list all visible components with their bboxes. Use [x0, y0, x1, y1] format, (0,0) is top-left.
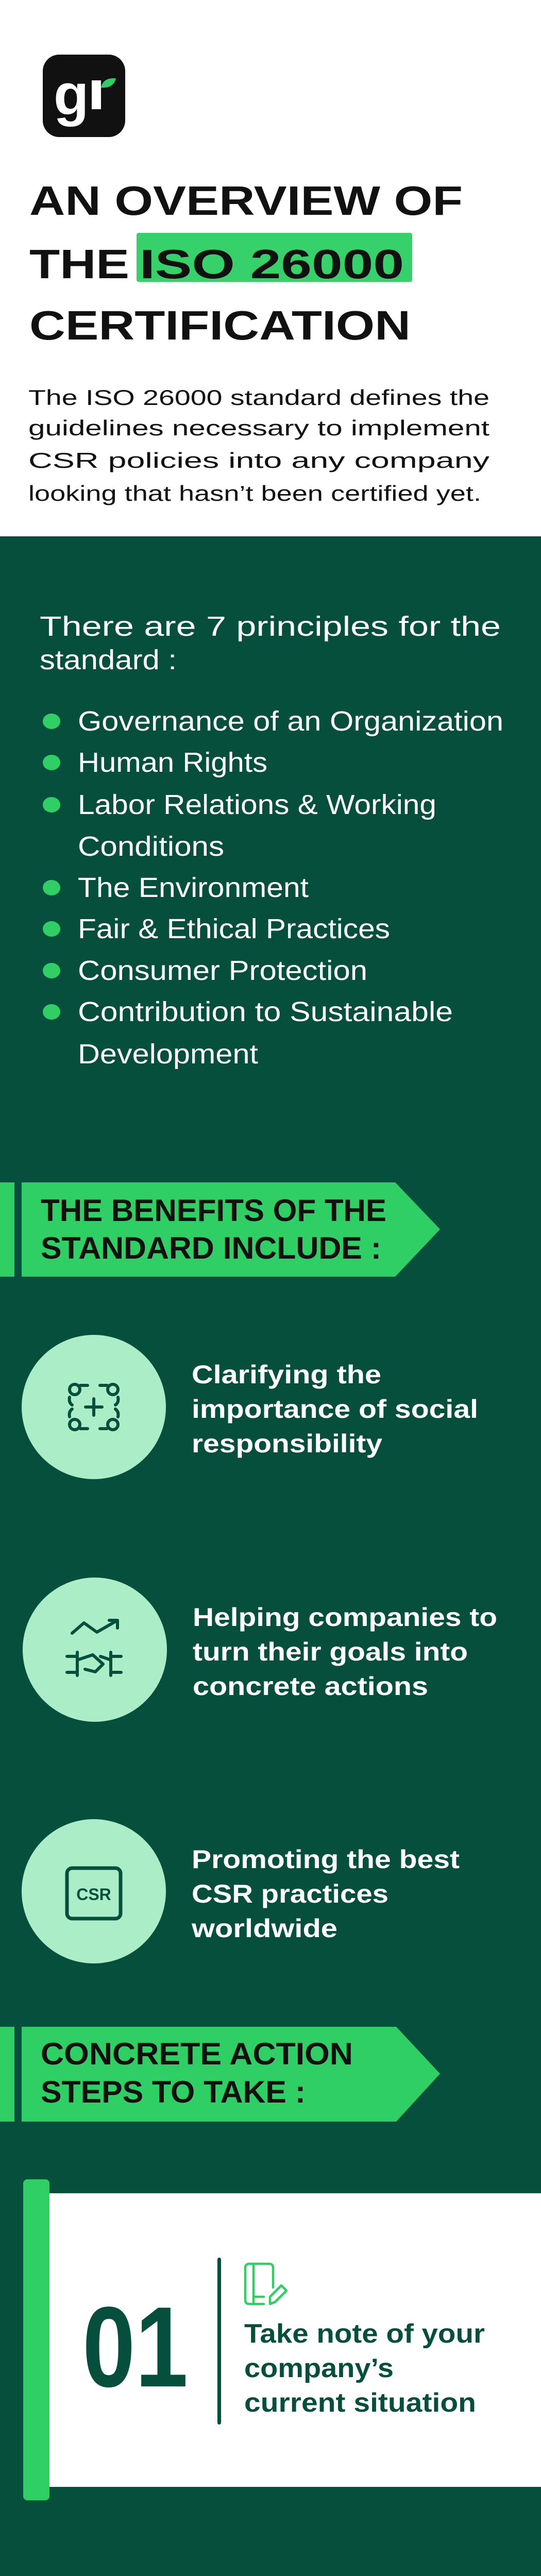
step card 01: company’s — [244, 2353, 394, 2383]
title: ISO 26000 — [140, 241, 404, 287]
step card 01: current situation — [244, 2388, 476, 2418]
banner: benefits heading — [0, 1182, 440, 1277]
benefit 3 — [22, 1819, 467, 1963]
benefit 1 — [22, 1335, 485, 1479]
list: 7 principles: Fair & Ethical Practices — [78, 913, 390, 944]
list: 7 principles: The Environment — [78, 872, 309, 903]
principles intro: standard : — [40, 645, 177, 675]
list: 7 principles: Development — [78, 1039, 258, 1070]
intro paragraph — [28, 385, 489, 505]
principles intro: There are 7 principles for the — [40, 611, 501, 642]
banner: benefits heading: STANDARD INCLUDE : — [41, 1231, 381, 1265]
icon: notebook pencil — [245, 2264, 286, 2304]
benefit 1: importance of social — [192, 1395, 478, 1423]
benefit 1: responsibility — [192, 1429, 382, 1458]
intro paragraph: looking that hasn’t been certified yet. — [28, 481, 481, 505]
title: AN OVERVIEW OF — [29, 178, 463, 224]
benefit 2 — [23, 1578, 504, 1722]
banner: concrete action steps heading: CONCRETE ACTION — [41, 2037, 353, 2071]
principles intro — [40, 611, 501, 675]
list: 7 principles: Contribution to Sustainable — [78, 996, 453, 1027]
banner: benefits heading: THE BENEFITS OF THE — [41, 1193, 386, 1228]
list: 7 principles: Consumer Protection — [78, 955, 367, 986]
step card 01 — [23, 2179, 541, 2500]
title: THE — [29, 241, 129, 287]
list: 7 principles: Labor Relations & Working — [78, 789, 436, 820]
benefit 2: turn their goals into — [193, 1637, 468, 1666]
banner: concrete action steps heading: STEPS TO TAKE : — [41, 2075, 306, 2109]
icon: CSR box — [22, 1819, 166, 1963]
benefit 3: worldwide — [191, 1914, 337, 1943]
icon: CSR box: CSR — [76, 1885, 111, 1904]
intro paragraph: The ISO 26000 standard defines the — [28, 385, 489, 410]
benefit 3: Promoting the best — [192, 1845, 460, 1874]
list: 7 principles: Governance of an Organization — [78, 706, 503, 737]
highlight: ISO 26000 — [137, 233, 412, 282]
list: 7 principles — [43, 706, 503, 1070]
logo: gr app icon — [43, 55, 125, 137]
intro paragraph: guidelines necessary to implement — [28, 416, 489, 440]
title — [29, 178, 463, 348]
logo: gr app icon: g — [54, 62, 89, 127]
list: 7 principles: Human Rights — [78, 747, 267, 778]
benefit 2: concrete actions — [193, 1672, 428, 1701]
step card 01: 01 — [82, 2283, 188, 2411]
title: CERTIFICATION — [29, 302, 411, 348]
benefit 3: CSR practices — [192, 1879, 388, 1908]
icon: people around plus — [22, 1335, 166, 1479]
benefit 1: Clarifying the — [192, 1360, 381, 1389]
banner: concrete action steps heading — [0, 2027, 440, 2122]
list: 7 principles: Conditions — [78, 831, 224, 862]
step card 01: Take note of your — [244, 2319, 485, 2349]
icon: growth handshake — [23, 1578, 167, 1722]
benefit 2: Helping companies to — [193, 1603, 497, 1632]
intro paragraph: CSR policies into any company — [28, 448, 489, 472]
